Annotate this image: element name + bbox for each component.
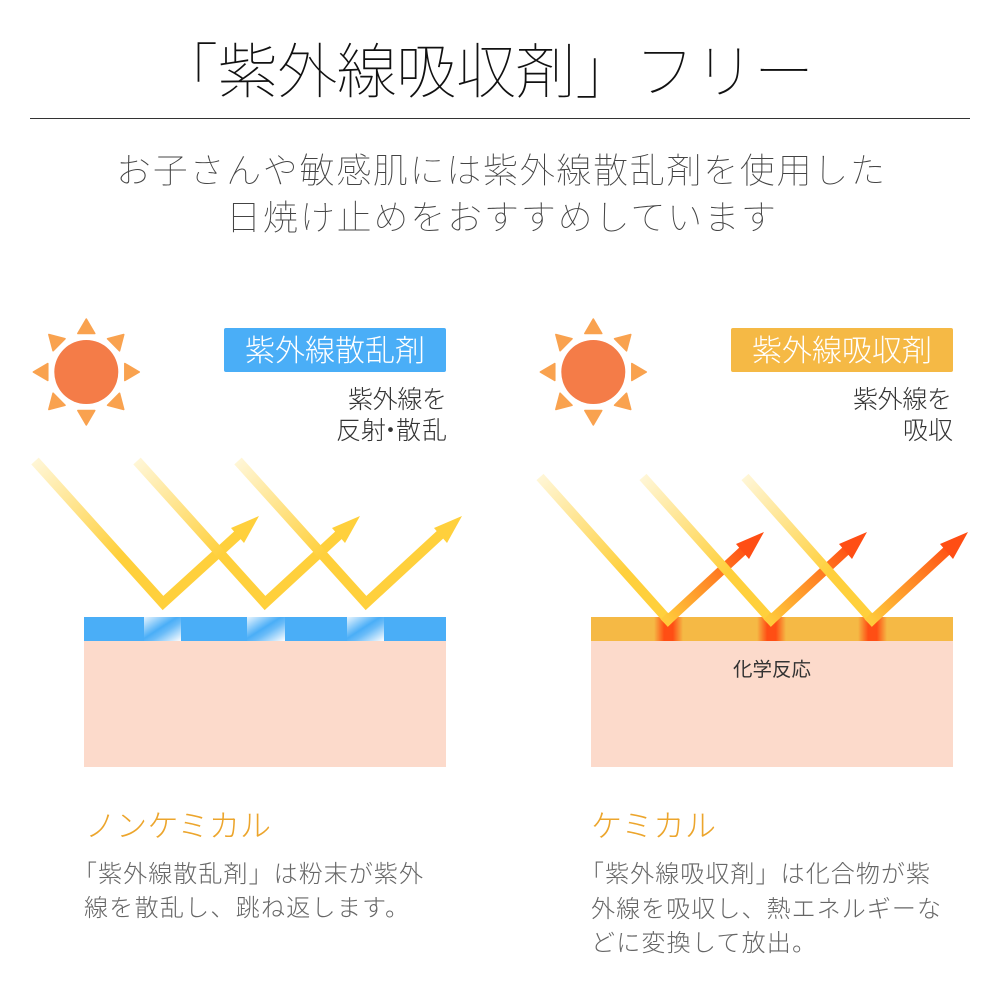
caption: scatter: 反射 [336, 417, 386, 445]
caption: absorb: 吸収 [903, 417, 953, 445]
label: absorbing agent [731, 328, 953, 372]
label: scattering agent [224, 328, 446, 372]
caption: scatter: 紫外線を [348, 386, 447, 414]
heading: non-chemical: ノンケミカル [85, 809, 271, 844]
caption: scatter: ・ [378, 417, 403, 445]
description: chemical [580, 861, 941, 957]
title: 「紫外線吸収剤」フリー [158, 39, 814, 106]
icon: sun right [540, 319, 646, 425]
header divider [30, 118, 970, 119]
skin layer left [84, 641, 446, 767]
subtitle: お子さんや敏感肌には紫外線散乱剤を使用した [116, 152, 885, 191]
caption: absorb [853, 386, 953, 445]
arrows: reflected rays [35, 461, 462, 603]
blue scattering layer [84, 617, 446, 641]
panel: chemical absorbing agent [540, 319, 968, 957]
description: non-chemical: 線を散乱し、跳ね返します。 [84, 895, 409, 922]
description: non-chemical [73, 861, 423, 922]
label: chemical reaction: 化学反応 [733, 659, 811, 681]
skin layer right [591, 641, 953, 767]
heading: chemical: ケミカル [591, 809, 716, 844]
subtitle [116, 152, 885, 238]
description: chemical: 「紫外線吸収剤」は化合物が紫 [580, 861, 930, 888]
caption: absorb: 紫外線を [853, 386, 952, 414]
caption: scatter [336, 386, 447, 445]
description: chemical: どに変換して放出。 [591, 930, 816, 957]
orange absorbing layer [591, 617, 953, 641]
label: scattering agent: 紫外線散乱剤 [245, 335, 425, 368]
caption: scatter: 散乱 [396, 417, 447, 445]
description: chemical: 外線を吸収し、熱エネルギーな [591, 896, 941, 923]
icon: sun left [33, 319, 139, 425]
subtitle: 日焼け止めをおすすめしています [226, 199, 776, 238]
panel: non-chemical scattering agent [33, 319, 462, 922]
label: absorbing agent: 紫外線吸収剤 [752, 335, 932, 368]
description: non-chemical: 「紫外線散乱剤」は粉末が紫外 [73, 861, 423, 888]
arrows: absorbed rays [540, 477, 968, 620]
